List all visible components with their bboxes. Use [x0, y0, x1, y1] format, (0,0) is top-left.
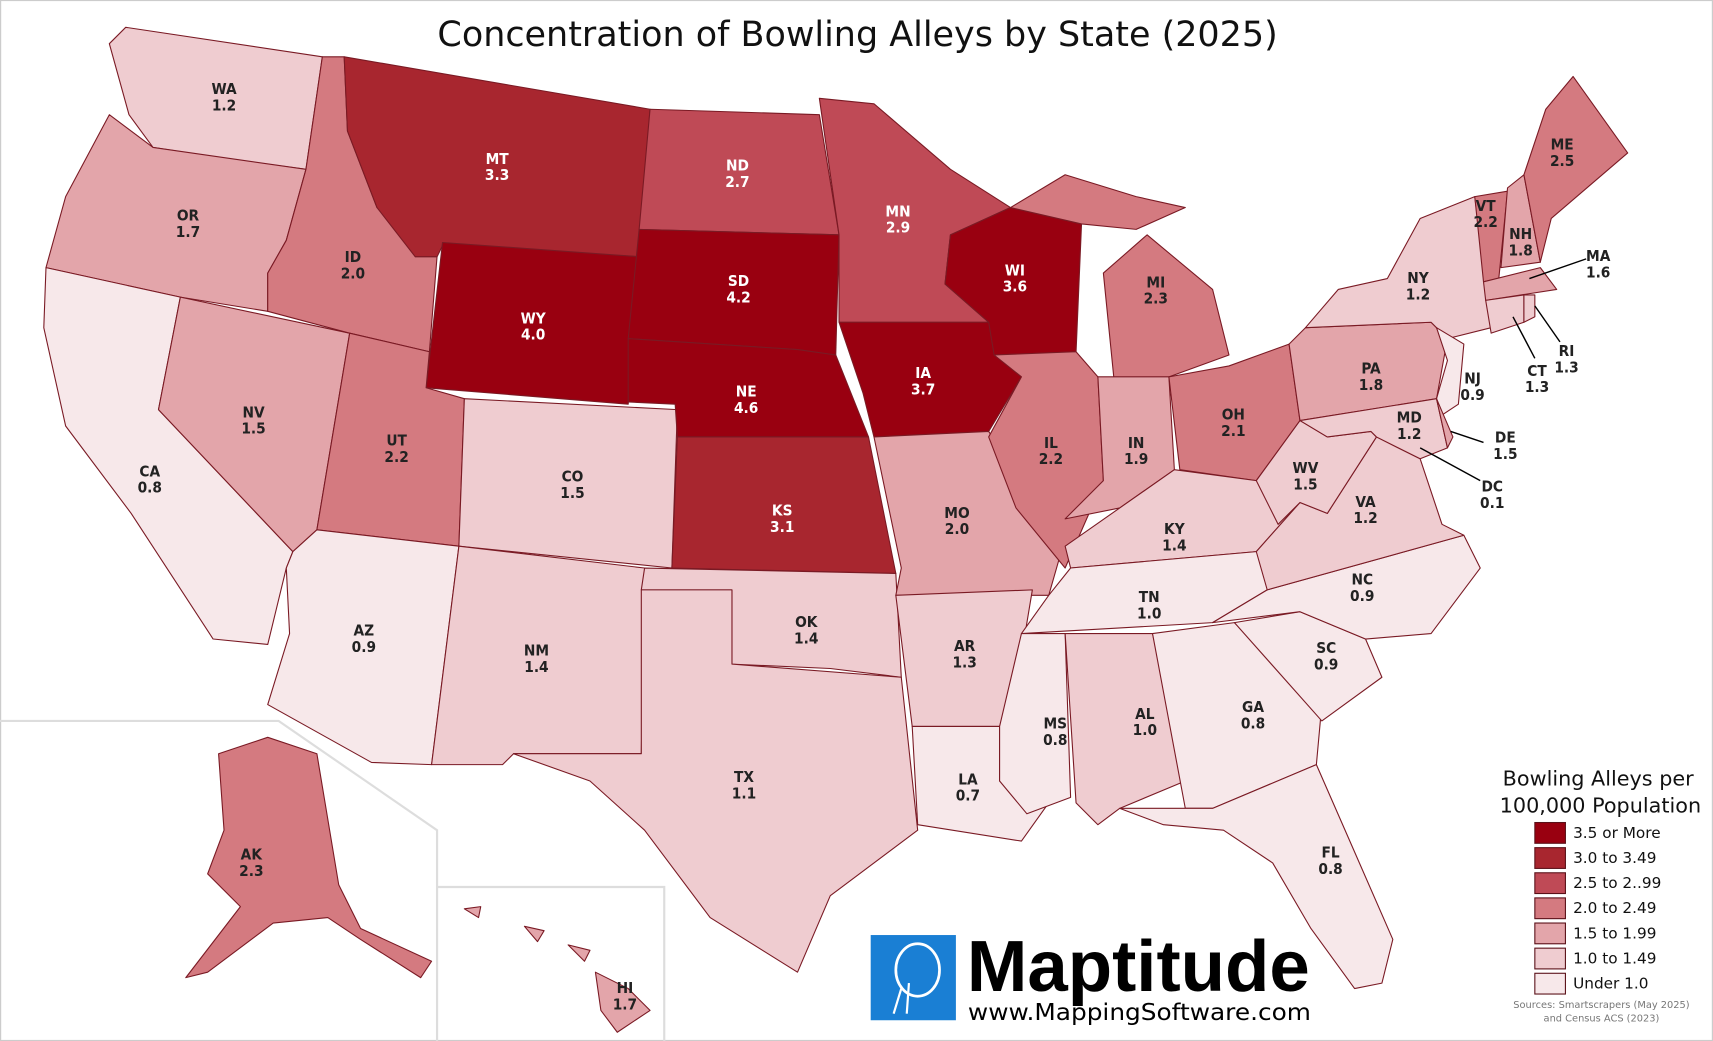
- state labels: WV: [1293, 459, 1319, 477]
- state labels: 0.8: [1241, 715, 1265, 733]
- state labels: DC: [1481, 478, 1503, 496]
- state labels: 0.9: [1314, 656, 1338, 674]
- state labels: 3.1: [770, 518, 794, 536]
- state labels: 1.3: [952, 653, 977, 671]
- legend: and Census ACS (2023): [1544, 1013, 1659, 1024]
- state labels: GA: [1242, 698, 1264, 716]
- state labels: 1.5: [241, 420, 266, 438]
- state labels: MN: [885, 202, 911, 220]
- state labels: ND: [726, 156, 749, 174]
- state labels: KS: [772, 502, 793, 520]
- state labels: WY: [521, 309, 547, 327]
- state labels: 0.8: [1318, 860, 1343, 878]
- legend: 2.0 to 2.49: [1573, 899, 1656, 917]
- state labels: 3.3: [485, 166, 509, 184]
- state labels: 1.5: [1293, 475, 1318, 493]
- state labels: NY: [1407, 269, 1430, 287]
- state labels: 2.2: [1474, 213, 1498, 231]
- legend: Bowling Alleys per: [1503, 766, 1694, 790]
- state labels: NJ: [1464, 369, 1481, 387]
- state labels: 2.0: [341, 265, 365, 283]
- state labels: MO: [944, 504, 970, 522]
- state labels: HI: [617, 979, 633, 997]
- state labels: 0.1: [1480, 494, 1504, 512]
- legend: 2.5 to 2..99: [1573, 874, 1661, 892]
- legend: [1500, 766, 1701, 1024]
- state labels: LA: [958, 770, 978, 788]
- state labels: 2.5: [1550, 152, 1574, 170]
- state labels: 2.3: [1144, 290, 1168, 308]
- state labels: 2.1: [1221, 422, 1246, 440]
- state labels: 1.0: [1133, 721, 1157, 739]
- state labels: 1.8: [1508, 242, 1533, 260]
- state labels: MD: [1397, 409, 1422, 427]
- state labels: 1.4: [524, 658, 549, 676]
- state labels: SC: [1316, 639, 1336, 657]
- state labels: AK: [241, 846, 263, 864]
- state labels: 1.2: [1353, 509, 1378, 527]
- legend: 1.0 to 1.49: [1573, 949, 1656, 967]
- state labels: 1.5: [1493, 445, 1518, 463]
- state labels: CT: [1527, 362, 1547, 380]
- state labels: OK: [795, 613, 819, 631]
- state labels: PA: [1361, 360, 1381, 378]
- state labels: 2.2: [1039, 450, 1063, 468]
- state labels: 1.4: [1162, 537, 1187, 555]
- state labels: TX: [734, 768, 754, 786]
- state labels: TN: [1139, 588, 1160, 606]
- state labels: 4.6: [734, 399, 758, 417]
- state labels: 2.9: [886, 219, 910, 237]
- state labels: RI: [1559, 342, 1574, 360]
- logo: www.MappingSoftware.com: [968, 1000, 1311, 1026]
- legend: Sources: Smartscrapers (May 2025): [1513, 1000, 1690, 1011]
- state labels: VA: [1355, 493, 1376, 511]
- state labels: IA: [915, 364, 931, 382]
- state labels: CA: [139, 462, 160, 480]
- state labels: DE: [1495, 428, 1516, 446]
- state labels: 1.5: [560, 484, 585, 502]
- state labels: CO: [562, 468, 583, 486]
- state labels: 2.3: [239, 862, 264, 880]
- state labels: FL: [1321, 843, 1340, 861]
- state labels: 3.7: [911, 380, 935, 398]
- state labels: AR: [954, 637, 976, 655]
- state labels: 1.2: [1406, 285, 1430, 303]
- state labels: UT: [386, 432, 408, 450]
- title: Concentration of Bowling Alleys by State (2025): [437, 15, 1278, 55]
- state labels: IN: [1128, 434, 1144, 452]
- inset frames: [0, 721, 664, 1041]
- legend: 3.5 or More: [1573, 824, 1661, 842]
- state labels: OR: [177, 207, 200, 225]
- state labels: 2.0: [945, 520, 969, 538]
- state labels: 1.2: [212, 96, 236, 114]
- state labels: 0.7: [956, 787, 980, 805]
- state labels: 1.4: [794, 629, 818, 647]
- state labels: NV: [242, 403, 265, 421]
- state labels: IL: [1044, 434, 1058, 452]
- state labels: AZ: [354, 622, 374, 640]
- state labels: MI: [1146, 273, 1165, 291]
- state labels: ME: [1551, 136, 1574, 154]
- state labels: 2.7: [725, 173, 750, 191]
- state labels: OH: [1222, 405, 1245, 423]
- state labels: 4.2: [726, 289, 751, 307]
- state labels: 4.0: [521, 326, 545, 344]
- state labels: NE: [736, 383, 757, 401]
- state labels: 1.6: [1586, 263, 1610, 281]
- callout lines: [1420, 259, 1586, 481]
- state labels: MS: [1044, 715, 1067, 733]
- state labels: MA: [1586, 247, 1611, 265]
- state labels: 2.2: [384, 448, 409, 466]
- state labels: 1.3: [1554, 358, 1579, 376]
- state labels: 1.2: [1397, 425, 1421, 443]
- logo: Maptitude: [967, 927, 1310, 1007]
- state labels: 1.0: [1137, 604, 1161, 622]
- state labels: NH: [1509, 225, 1532, 243]
- state labels: KY: [1164, 520, 1186, 538]
- state labels: 1.9: [1124, 450, 1148, 468]
- legend: 100,000 Population: [1500, 794, 1701, 818]
- state labels: 1.1: [732, 785, 756, 803]
- logo: [871, 927, 1311, 1026]
- state labels: SD: [728, 272, 749, 290]
- legend: 3.0 to 3.49: [1573, 849, 1656, 867]
- state labels: MT: [486, 150, 509, 168]
- state labels: [138, 80, 1611, 1013]
- state labels: 1.8: [1359, 376, 1383, 394]
- state labels: ID: [345, 248, 361, 266]
- state labels: 0.9: [352, 638, 376, 656]
- state labels: NC: [1351, 570, 1373, 588]
- state labels: 3.6: [1003, 278, 1027, 296]
- state labels: 0.9: [1350, 587, 1374, 605]
- state labels: 0.8: [138, 479, 162, 497]
- state labels: 1.7: [613, 995, 637, 1013]
- state labels: 0.9: [1460, 386, 1485, 404]
- state labels: NM: [524, 641, 549, 659]
- state labels: 1.7: [176, 223, 200, 241]
- legend: Under 1.0: [1573, 975, 1648, 993]
- state labels: 0.8: [1043, 731, 1067, 749]
- state labels: AL: [1135, 705, 1155, 723]
- state labels: 1.3: [1525, 378, 1549, 396]
- legend: 1.5 to 1.99: [1573, 924, 1656, 942]
- state labels: WI: [1005, 261, 1025, 279]
- state labels: VT: [1476, 197, 1496, 215]
- state labels: WA: [211, 80, 237, 98]
